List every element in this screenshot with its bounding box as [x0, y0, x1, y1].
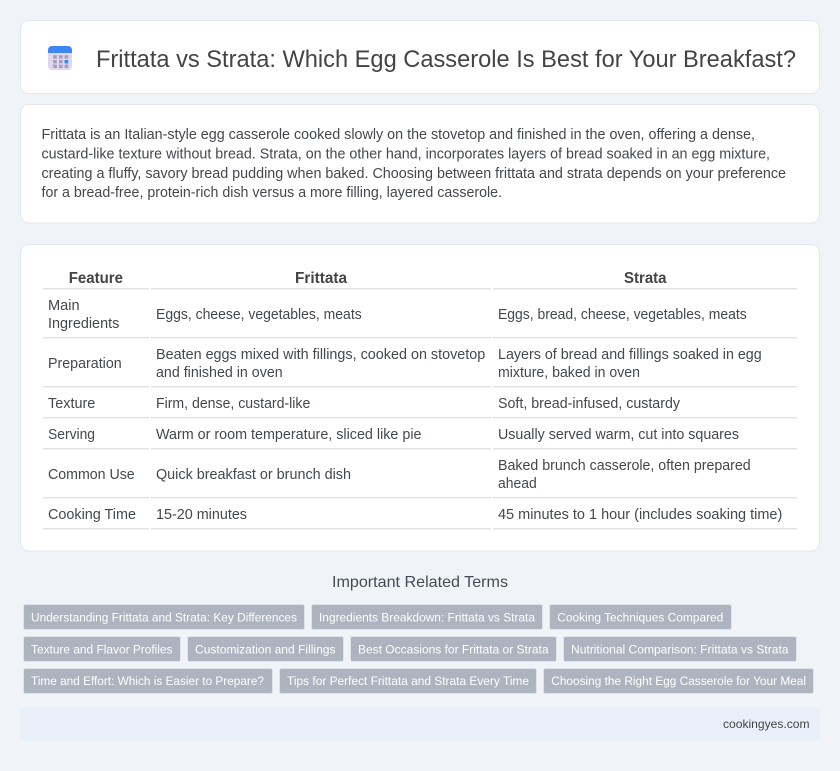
- table row: serving: [43, 427, 797, 449]
- tag: Nutritional Comparison: Frittata vs Strata: [571, 642, 789, 656]
- table row: serving: Serving: [48, 427, 95, 443]
- footer: [20, 707, 820, 741]
- text block: introduction paragraph: for a bread-free, protein-rich dish versus a more filling, layered casserole.: [42, 185, 502, 201]
- tag: Cooking Techniques Compared: [557, 610, 723, 624]
- tag: Choosing the Right Egg Casserole for Your Meal: [551, 674, 806, 688]
- table row: preparation: and finished in oven: [156, 365, 283, 381]
- table row: common use: Common Use: [48, 467, 135, 483]
- panel: comparison table: [20, 244, 820, 551]
- table row: preparation: Layers of bread and fillings soaked in egg: [498, 347, 762, 363]
- table row: common use: [43, 458, 797, 498]
- table row: main ingredients: Main: [48, 298, 80, 314]
- table row: texture: Texture: [48, 396, 95, 412]
- table row: main ingredients: Eggs, cheese, vegetables, meats: [156, 307, 362, 323]
- tag: Best Occasions for Frittata or Strata: [358, 642, 549, 656]
- tag: [564, 636, 796, 662]
- tag: [550, 604, 732, 630]
- table row: texture: [43, 396, 797, 418]
- table row: serving: Usually served warm, cut into squares: [498, 427, 739, 443]
- tag: [280, 668, 536, 694]
- icon: calendar: [48, 46, 72, 70]
- tag: [312, 604, 542, 630]
- table row: cooking time: 15-20 minutes: [156, 507, 247, 523]
- table row: main ingredients: [43, 298, 797, 338]
- title: Frittata vs Strata: Which Egg Casserole Is Best for Your Breakfast?: [96, 46, 796, 73]
- text block: introduction paragraph: Frittata is an Italian-style egg casserole cooked slowly on the stovetop and finished in the oven, offering a dense,: [42, 127, 755, 143]
- text block: introduction paragraph: [42, 127, 786, 201]
- tag: Understanding Frittata and Strata: Key Differences: [31, 610, 297, 624]
- table row: common use: ahead: [498, 476, 537, 492]
- table header row: Strata: [624, 270, 667, 287]
- footer: cookingyes.com: [723, 717, 810, 731]
- table row: cooking time: [43, 507, 797, 529]
- table row: main ingredients: Eggs, bread, cheese, vegetables, meats: [498, 307, 747, 323]
- tag: [24, 604, 304, 630]
- table row: preparation: Beaten eggs mixed with fillings, cooked on stovetop: [156, 347, 485, 363]
- table row: cooking time: 45 minutes to 1 hour (includes soaking time): [498, 507, 782, 523]
- tag: [188, 636, 344, 662]
- table row: serving: Warm or room temperature, sliced like pie: [156, 427, 422, 443]
- table header row: Frittata: [295, 270, 347, 287]
- table row: common use: Quick breakfast or brunch dish: [156, 467, 351, 483]
- table row: common use: Baked brunch casserole, often prepared: [498, 458, 751, 474]
- tag: [24, 668, 272, 694]
- tag: Time and Effort: Which is Easier to Prepare?: [31, 674, 264, 688]
- table row: texture: Soft, bread-infused, custardy: [498, 396, 681, 412]
- tag: Tips for Perfect Frittata and Strata Every Time: [287, 674, 529, 688]
- table header row: Feature: [69, 270, 123, 287]
- table header row: [43, 270, 797, 289]
- table row: main ingredients: Ingredients: [48, 316, 119, 332]
- table row: cooking time: Cooking Time: [48, 507, 136, 523]
- tag: Texture and Flavor Profiles: [31, 642, 172, 656]
- text block: introduction paragraph: creating a fluffy, savory bread pudding when baked. Choosing between frittata and strata depends on your preference: [42, 166, 786, 182]
- heading: important related terms: Important Related Terms: [332, 574, 508, 591]
- tag: Ingredients Breakdown: Frittata vs Strata: [319, 610, 535, 624]
- table row: preparation: Preparation: [48, 356, 122, 372]
- table row: texture: Firm, dense, custard-like: [156, 396, 310, 412]
- table row: preparation: [43, 347, 797, 387]
- tag: Customization and Fillings: [195, 642, 336, 656]
- panel: header: [20, 20, 820, 94]
- text block: introduction paragraph: custard-like texture without bread. Strata, on the other hand, incorporates layers of bread soaked in an egg mixture,: [42, 146, 770, 162]
- panel: introduction: [20, 104, 820, 223]
- tag: [544, 668, 814, 694]
- panel: related term tags: [24, 604, 814, 694]
- tag: [350, 636, 556, 662]
- tag: [24, 636, 180, 662]
- table row: preparation: mixture, baked in oven: [498, 365, 640, 381]
